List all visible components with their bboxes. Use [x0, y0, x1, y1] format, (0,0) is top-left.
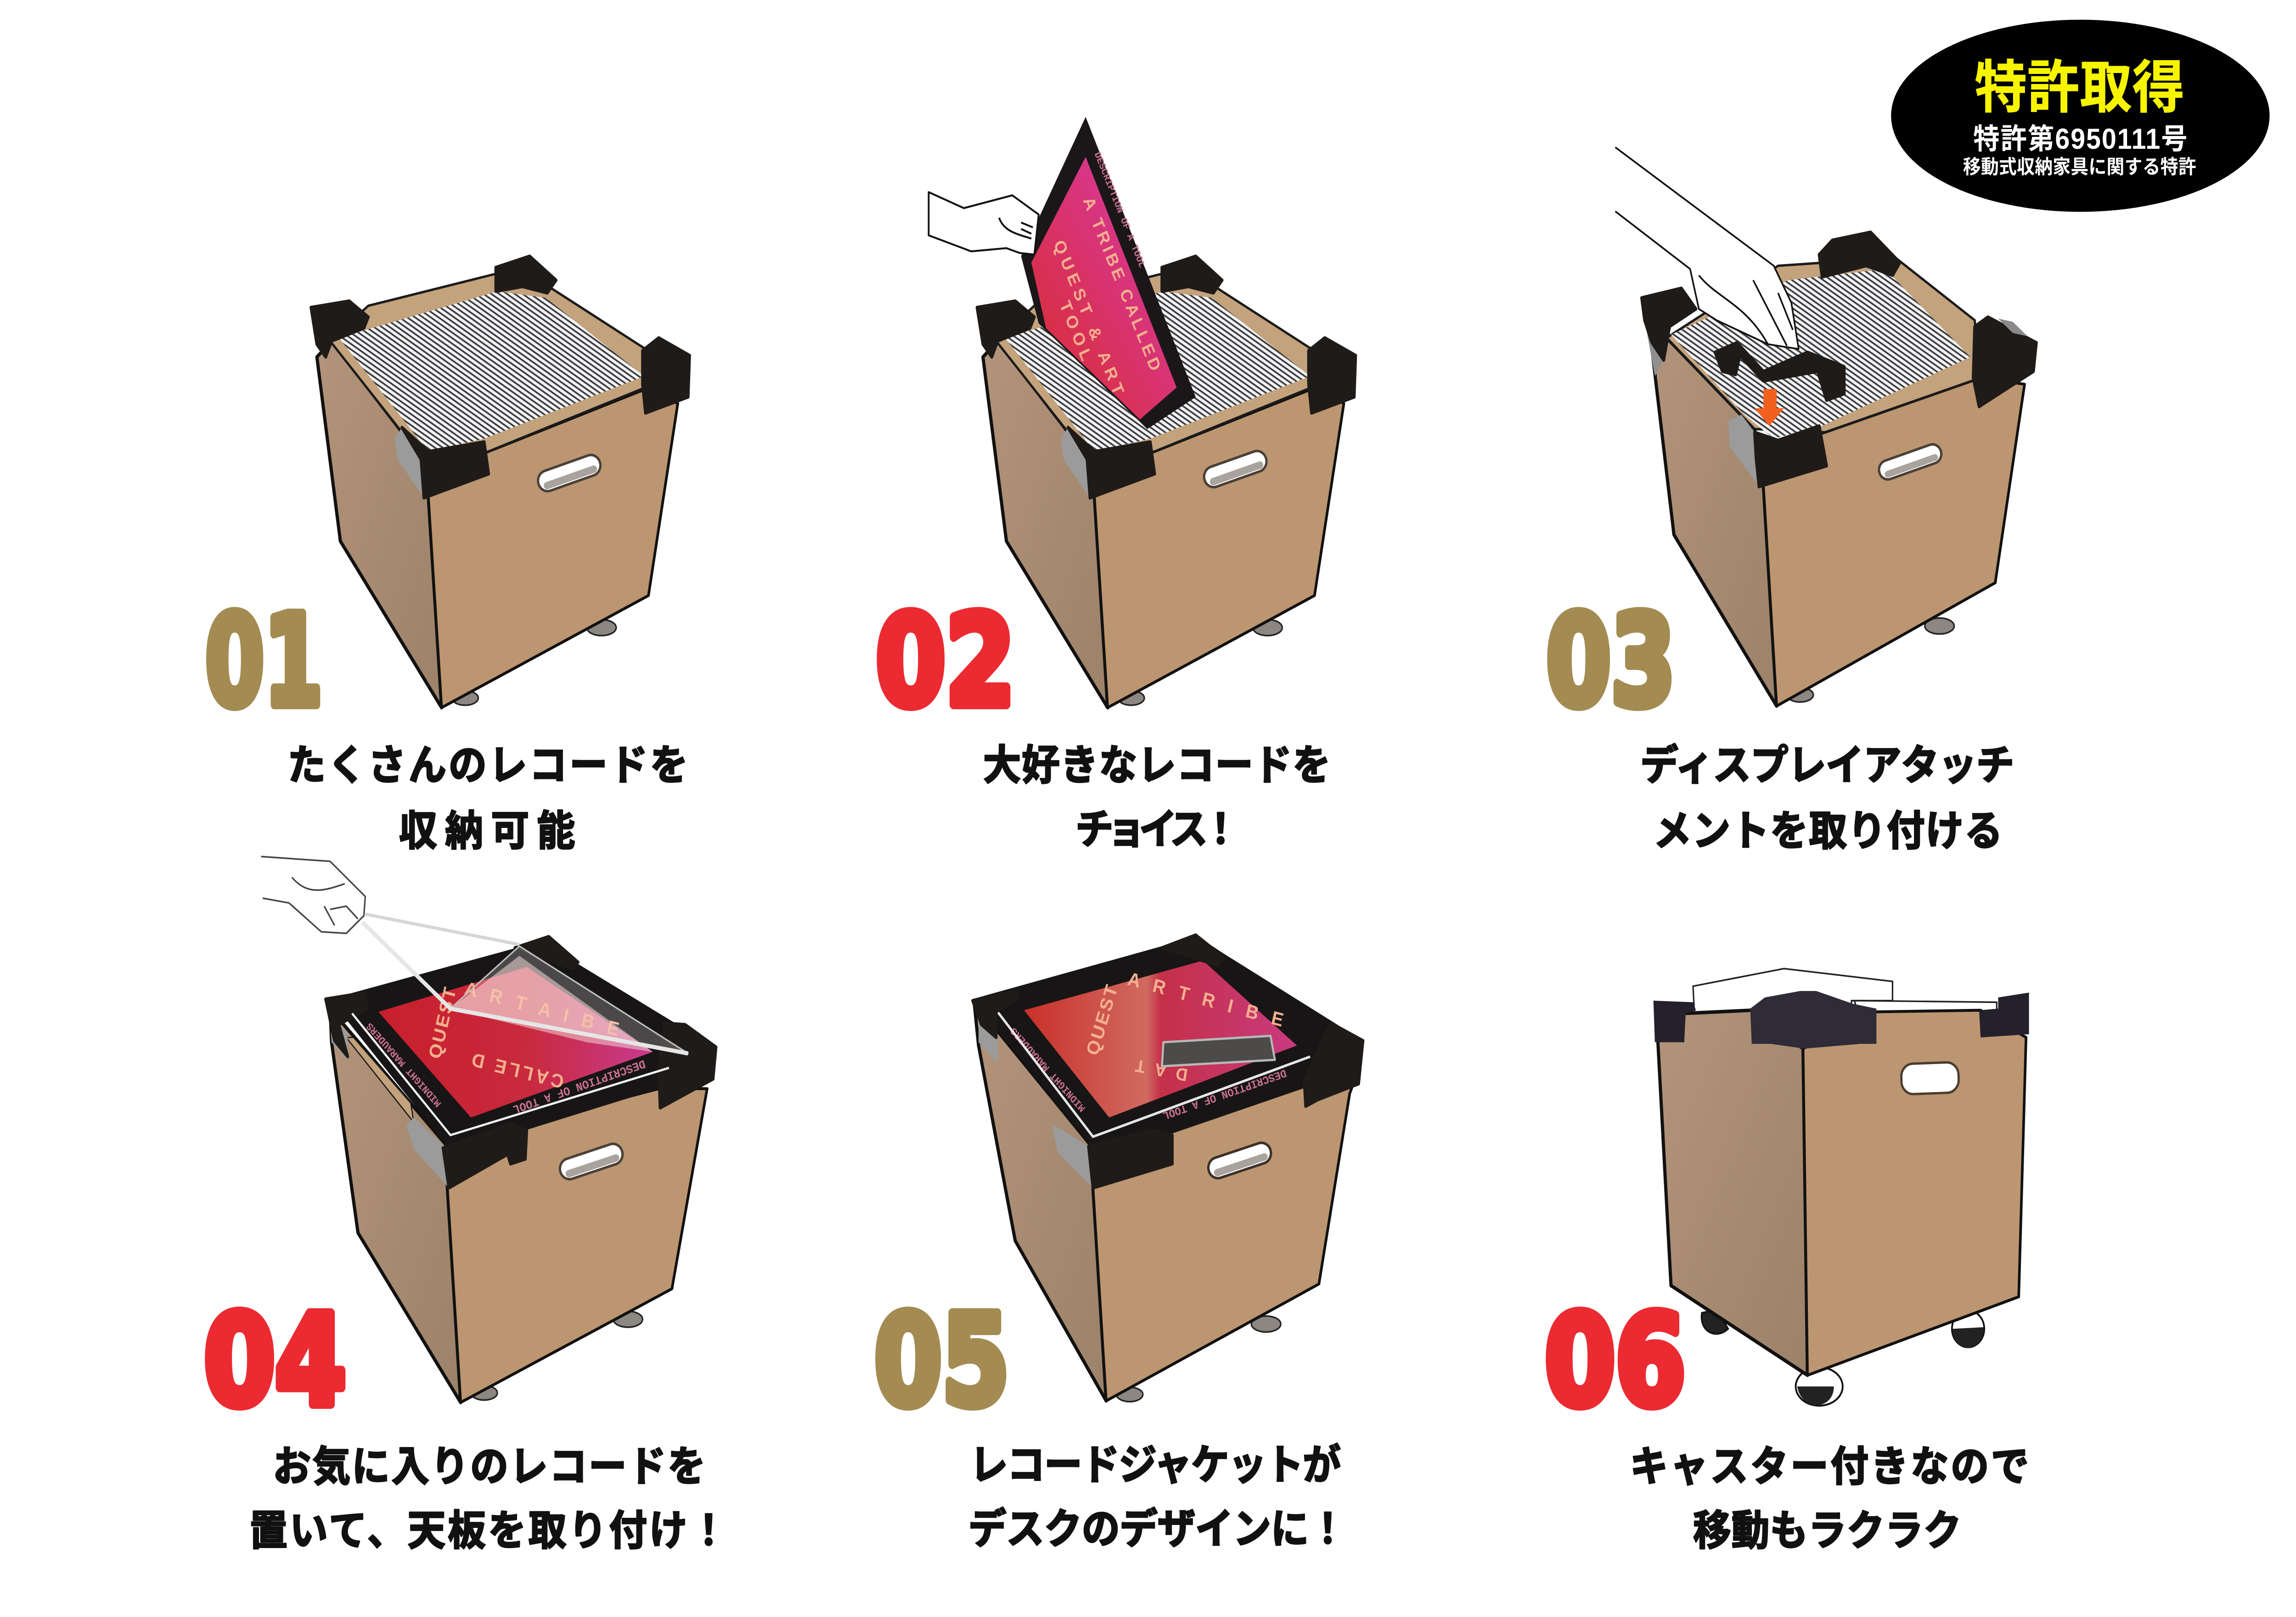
- patent number: 特許第6950111号: [1973, 123, 2188, 155]
- caption 03: [1640, 742, 2015, 854]
- caption 03: ディスプレイアタッチ: [1640, 742, 2015, 789]
- number 01: 01: [205, 589, 323, 734]
- box 05 illustration: A R T R I B E: [1126, 968, 1290, 1032]
- panel: step 06: [1545, 969, 2029, 1554]
- caption 04: [249, 1443, 728, 1554]
- box 04 illustration: MIDNIGHT MARAUDERS: [365, 1020, 444, 1109]
- box 04 illustration: [326, 936, 716, 1403]
- box 03 illustration: [1642, 232, 2037, 706]
- record jacket being chosen: TOOL: [1056, 298, 1097, 368]
- badge title: 特許取得: [1975, 56, 2184, 120]
- caption 05: レコードジャケットが: [970, 1442, 1341, 1488]
- box 01 illustration: [311, 256, 690, 708]
- caption 01: 収納可能: [399, 808, 575, 854]
- acrylic top panel: [352, 914, 688, 1135]
- box 05 illustration: [973, 935, 1363, 1402]
- caption 04: 置いて、天板を取り付け！: [249, 1508, 728, 1554]
- panel: step 05: [874, 935, 1363, 1552]
- hand lifting acrylic top: [261, 856, 366, 933]
- number 02: 02: [876, 589, 1015, 734]
- box 05 illustration: D A T: [1131, 1055, 1189, 1085]
- hand placing attachment: [1615, 147, 1799, 349]
- box 05 illustration: DESCRIPTION OF A TOOL: [1161, 1066, 1288, 1121]
- box 04 illustration: A R T A I B E: [463, 977, 625, 1042]
- record jacket being chosen: DESCRIPTION OF A TOOL: [1092, 151, 1147, 270]
- smartphone on desk top: [1162, 1036, 1275, 1066]
- caption 04: お気に入りのレコードを: [273, 1443, 706, 1490]
- box 05 illustration: MIDNIGHT MARAUDERS: [1008, 1025, 1088, 1114]
- panel: step 02: [876, 117, 1356, 853]
- caption 02: 大好きなレコードを: [983, 742, 1331, 789]
- caption 02: [983, 742, 1331, 853]
- caption 06: 移動もラクラク: [1693, 1508, 1962, 1554]
- record jacket being chosen: [1021, 117, 1196, 429]
- caption 05: デスクのデザインに！: [968, 1506, 1347, 1552]
- box 04 illustration: CALLE D: [467, 1048, 566, 1093]
- arrow: down: [1755, 389, 1784, 426]
- caption 03: メントを取り付ける: [1654, 808, 2003, 854]
- caster left: [1701, 1310, 1728, 1334]
- number 06: 06: [1545, 1288, 1686, 1434]
- caption 01: [287, 742, 688, 854]
- box 05 illustration: QUEST: [1082, 981, 1122, 1058]
- caption 06: キャスター付きなので: [1630, 1443, 2029, 1490]
- caster front: [1796, 1367, 1843, 1406]
- caption 06: [1630, 1443, 2029, 1554]
- number 03: 03: [1546, 589, 1676, 734]
- caption 05: [968, 1442, 1347, 1552]
- panel: step 01: [205, 256, 690, 854]
- box 06 illustration: [1654, 969, 2029, 1406]
- caption 02: チョイス！: [1075, 806, 1240, 853]
- panel: step 04: [204, 856, 728, 1554]
- panel: step 03: [1546, 147, 2037, 854]
- patent description: 移動式収納家具に関する特許: [1963, 156, 2196, 178]
- record jacket being chosen: A TRIBE CALLED: [1080, 194, 1166, 377]
- number 04: 04: [204, 1288, 346, 1434]
- caster right: [1952, 1310, 1984, 1348]
- hand holding jacket: [929, 192, 1039, 254]
- record jacket being chosen: QUEST & ART: [1050, 237, 1129, 402]
- box 04 illustration: DESCRIPTION OF A TOOL: [511, 1056, 647, 1116]
- box 02 illustration: [977, 256, 1356, 708]
- caption 01: たくさんのレコードを: [287, 742, 688, 789]
- display attachment: [1715, 343, 1844, 400]
- box 04 illustration: QUEST: [425, 984, 461, 1061]
- number 05: 05: [874, 1288, 1009, 1434]
- records on top: [1693, 969, 1997, 1015]
- patent badge: [1891, 20, 2269, 212]
